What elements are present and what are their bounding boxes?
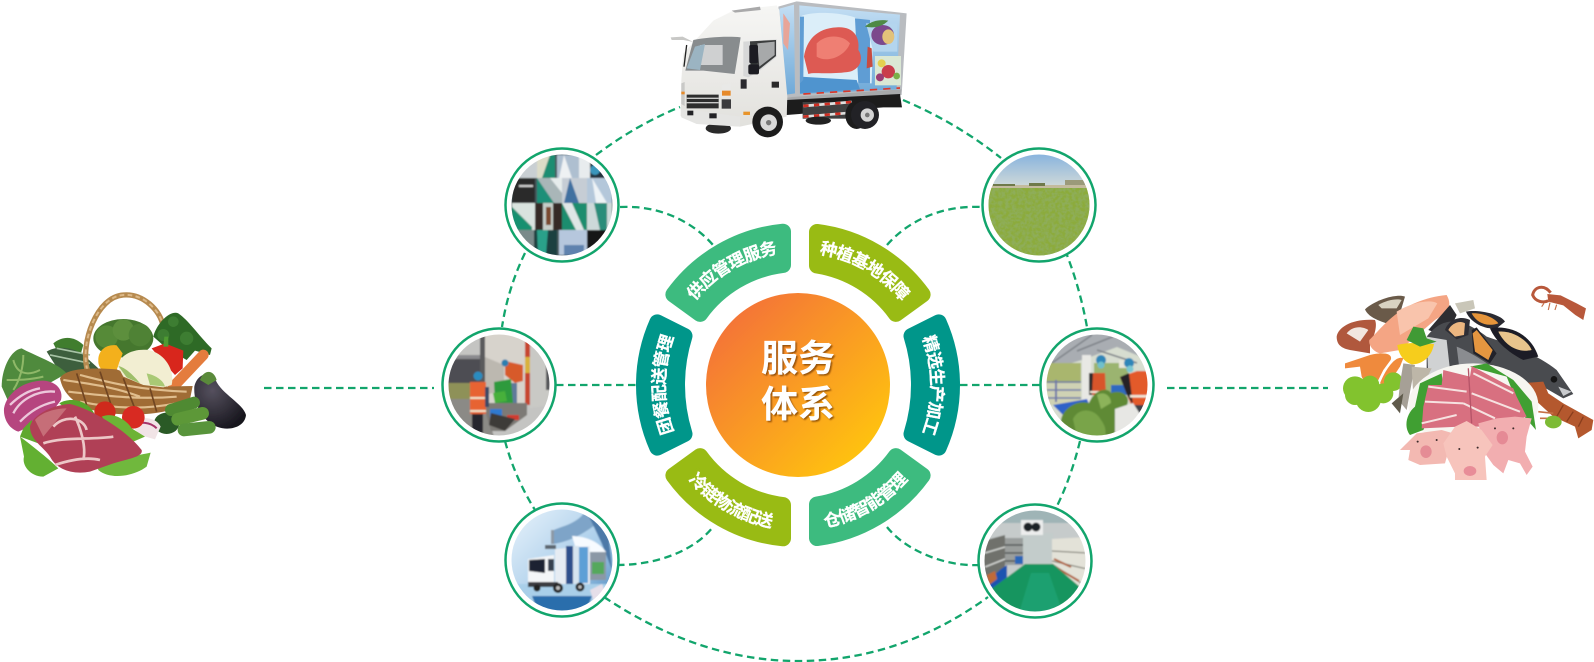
small fish [1398,363,1415,410]
shrimp [1345,353,1391,387]
center circle: 服务体系: 服务 [761,338,835,379]
mussels [1466,311,1505,329]
sliced pork [1422,366,1527,428]
broccoli [93,319,153,358]
raw meat [30,404,142,473]
truck box [778,1,907,102]
photo: delivery truck unloading [442,328,556,442]
illustration: seafood and pork [1337,287,1593,480]
segment: 仓储智能管理 [809,448,931,546]
lettuce pieces [59,400,95,420]
piglet right [1478,417,1533,475]
illustration: refrigerated truck [671,1,907,137]
segment: 种植基地保障 [809,224,931,322]
carrots [173,355,203,387]
purple cabbage [4,381,61,432]
segment: 团餐配送管理 [636,314,692,456]
red onion [130,418,161,439]
basket handle [86,295,163,370]
segment: 供应管理服务: 供应管理服务 [686,241,776,300]
dashed connector network [264,100,1328,661]
segment: 精选生产加工: 精选生产加工 [922,334,946,436]
crab left [1337,320,1376,353]
oysters [1365,296,1405,323]
piglet center [1443,421,1493,480]
large fish [1427,322,1573,398]
lettuce [1343,372,1403,412]
tomatoes [94,401,116,423]
photo: vegetable processing workers [1040,328,1154,442]
photo: cold storage room [978,504,1092,618]
center circle: 服务体系: 体系 [761,384,835,425]
eggplant [194,374,246,429]
parsley [153,313,212,360]
crayfish top right [1533,287,1586,320]
segment: 种植基地保障: 种植基地保障 [820,240,911,301]
segment: 供应管理服务 [665,224,791,322]
segment: 仓储智能管理: 仓储智能管理 [824,470,909,528]
piglet left [1400,430,1453,465]
segment: 团餐配送管理: 团餐配送管理 [650,334,675,436]
illustration: vegetable basket and meat [2,295,246,477]
salmon [1369,295,1449,353]
photo: planting field [982,148,1096,262]
truck cab [671,5,787,127]
truck wheels [752,101,879,137]
cauliflower [118,350,172,387]
plate [1408,363,1538,447]
lemon and herb [1397,343,1434,364]
photo: cold chain truck [506,504,618,616]
truck chassis [706,94,902,134]
red pepper [152,343,183,375]
savoy cabbage [2,348,67,402]
photo: supply management monitoring wall [506,148,618,262]
cucumbers [154,413,179,434]
green leaves behind [53,338,83,357]
plate lettuce [1406,373,1443,435]
right lobster [1520,382,1593,438]
center circle: 服务体系 [706,293,890,477]
segment: 冷链物流配送: 冷链物流配送 [688,471,774,529]
yellow pepper [98,345,123,372]
segment: 精选生产加工 [904,314,960,456]
basket body [60,368,193,415]
segment: 冷链物流配送 [665,448,791,546]
